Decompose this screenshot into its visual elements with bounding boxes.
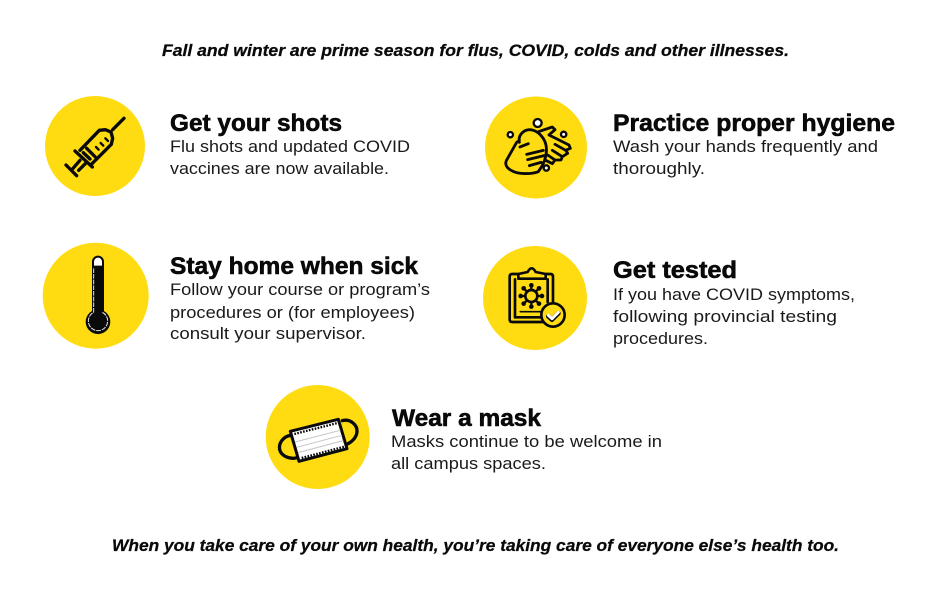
body text <box>613 286 855 348</box>
body text <box>170 138 410 178</box>
panel: stay home when sick <box>43 243 430 349</box>
body text: vaccines are now available. <box>170 160 389 178</box>
icon: thermometer <box>43 243 149 349</box>
icon: syringe <box>45 96 145 196</box>
panel: get tested <box>483 246 855 350</box>
top tagline: Fall and winter are prime season for flus, COVID, colds and other illnesses. <box>162 41 789 60</box>
body text: procedures. <box>613 330 708 348</box>
heading: Get your shots <box>170 110 342 137</box>
panel: practice proper hygiene <box>485 96 895 198</box>
icon: face mask <box>266 385 370 489</box>
panel: wear a mask <box>266 385 662 489</box>
body text: consult your supervisor. <box>170 325 366 343</box>
closing tagline: When you take care of your own health, you’re taking care of everyone else’s health too. <box>112 536 839 555</box>
heading: Practice proper hygiene <box>613 110 895 137</box>
body text: thoroughly. <box>613 160 705 178</box>
body text: procedures or (for employees) <box>170 304 415 322</box>
body text: all campus spaces. <box>391 455 546 473</box>
icon: clipboard with virus and check <box>483 246 587 350</box>
body text: Masks continue to be welcome in <box>391 433 662 451</box>
body text: Wash your hands frequently and <box>613 138 878 156</box>
panel: get your shots <box>45 96 410 196</box>
heading: Get tested <box>613 257 737 284</box>
icon: washing hands <box>485 96 587 198</box>
heading: Wear a mask <box>392 405 541 432</box>
body text: Follow your course or program’s <box>170 281 430 299</box>
body text <box>170 281 430 343</box>
body text <box>391 433 662 473</box>
body text: If you have COVID symptoms, <box>613 286 855 304</box>
body text: Flu shots and updated COVID <box>170 138 410 156</box>
body text: following provincial testing <box>613 308 837 326</box>
heading: Stay home when sick <box>170 253 418 280</box>
body text <box>613 138 878 178</box>
